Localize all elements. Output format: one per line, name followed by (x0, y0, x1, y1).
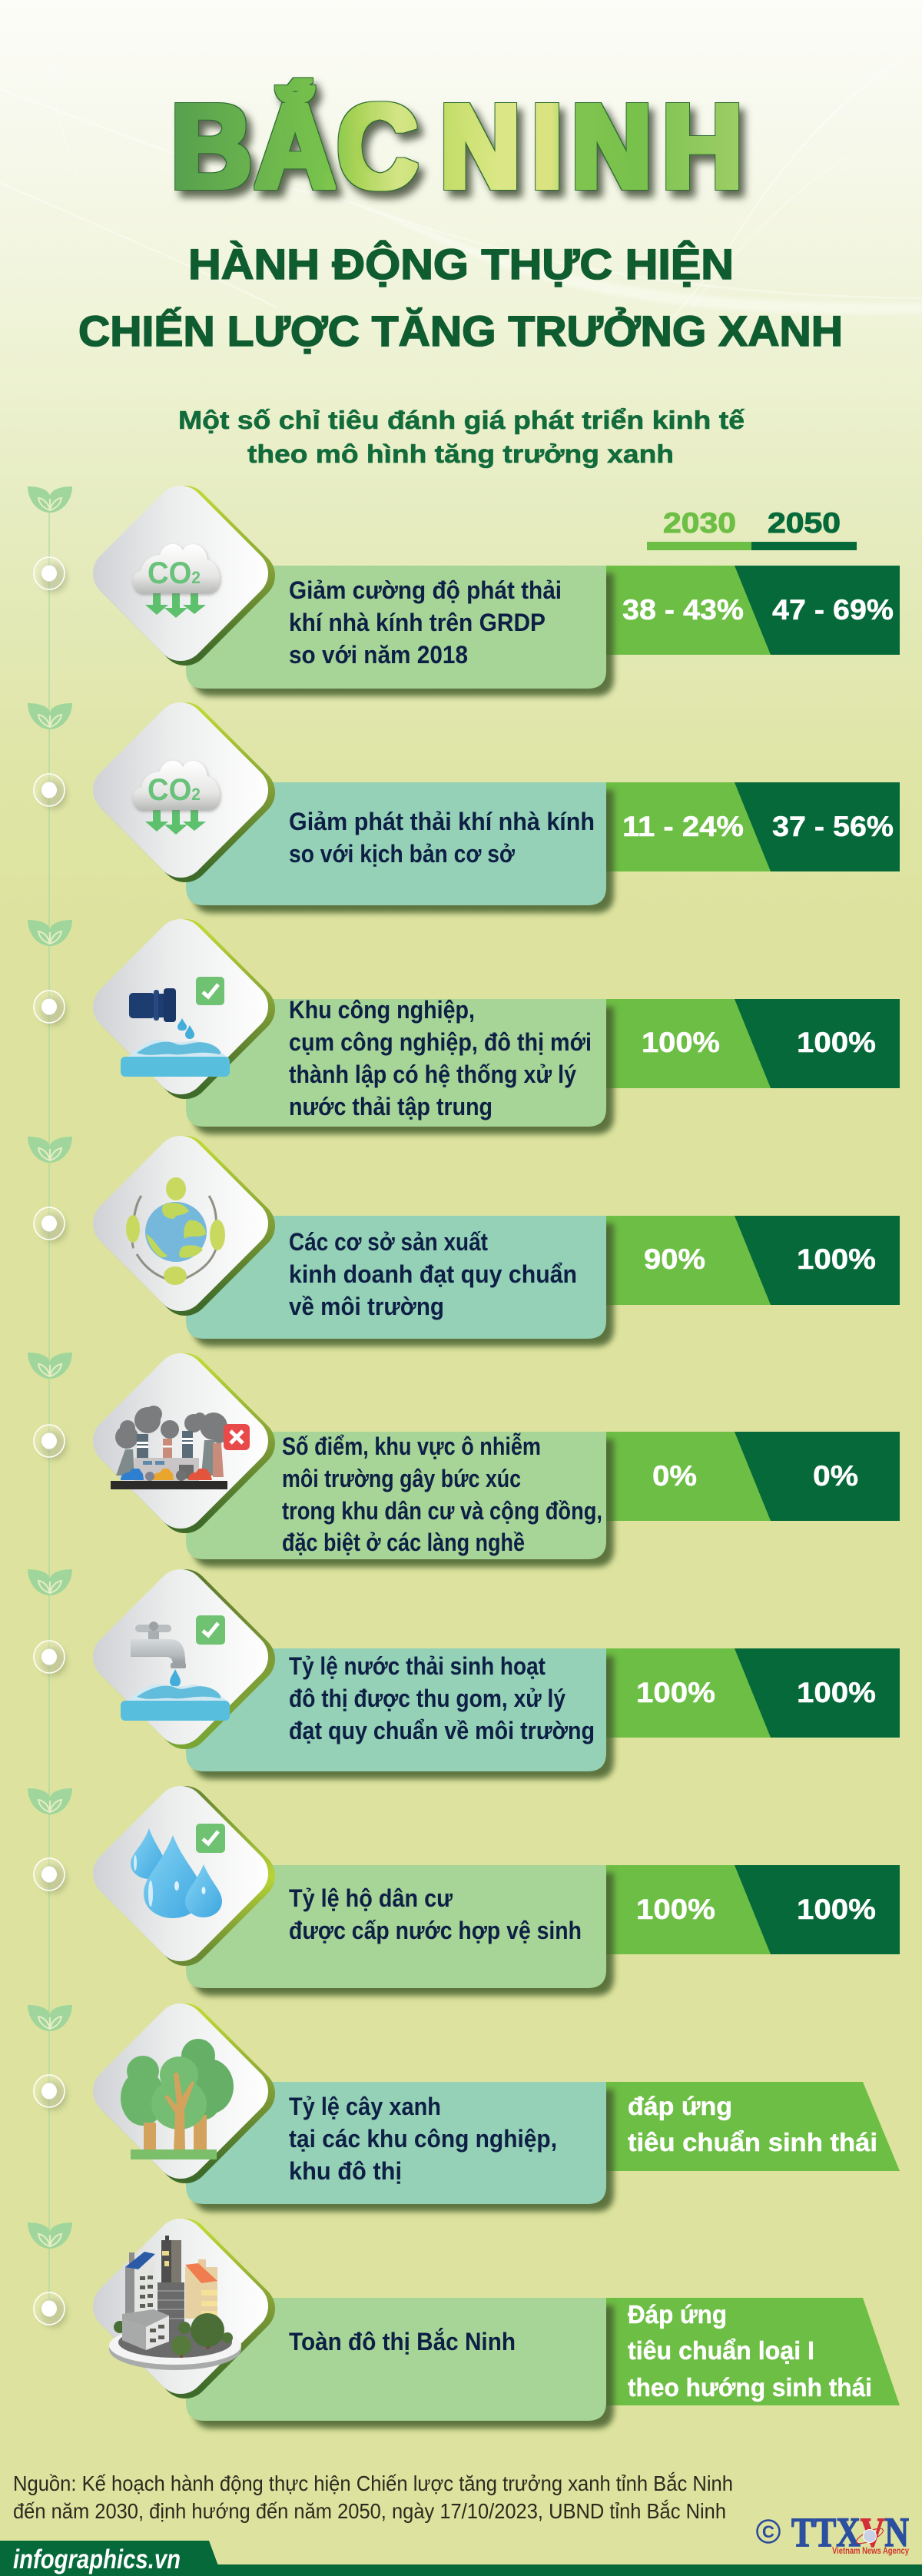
copyright logo: TTXVN: TTXVN (791, 2509, 909, 2555)
text panel 6: Tỷ lệ nước thải sinh hoạt (289, 1652, 546, 1680)
value bar 6 (606, 1648, 900, 1738)
row 9 (28, 2222, 900, 2428)
text panel 7: Tỷ lệ hộ dân cư (289, 1884, 453, 1912)
timeline marker 3 (28, 920, 72, 1026)
icon: CO2 cloud: CO2 (148, 556, 201, 590)
value bar 2: 11 - 24% (622, 811, 744, 842)
background swooshes (0, 46, 922, 323)
value bar 8: tiêu chuẩn sinh thái (628, 2128, 877, 2156)
heading: line 1: HÀNH ĐỘNG THỰC HIỆN (188, 240, 734, 288)
text panel 3: cụm công nghiệp, đô thị mới (289, 1028, 592, 1056)
row 3 (28, 920, 900, 1134)
timeline marker 9 (28, 2222, 72, 2328)
text panel 3: thành lập có hệ thống xử lý (289, 1061, 576, 1088)
value bar 4: 90% (644, 1243, 705, 1275)
icon: trees (121, 2039, 234, 2159)
value bar 9: tiêu chuẩn loại I (628, 2336, 814, 2365)
icon: CO2 cloud (133, 761, 220, 835)
icon: polluting factory (111, 1406, 250, 1489)
text panel 3: Khu công nghiệp, (289, 996, 475, 1024)
value bar 2: 37 - 56% (772, 811, 894, 842)
value bar 6: 100% (636, 1677, 715, 1708)
text panel 2 (186, 782, 614, 913)
footer band: infographics.vn (13, 2544, 181, 2574)
value bar 7: 100% (636, 1894, 715, 1925)
text panel 4: về môi trường (289, 1293, 444, 1320)
text panel 1: so với năm 2018 (289, 641, 468, 669)
icon: CO2 cloud: CO2 (148, 773, 201, 807)
icon diamond 5 (118, 1378, 250, 1509)
text panel 8: Tỷ lệ cây xanh (289, 2093, 441, 2120)
timeline marker 7 (28, 1788, 72, 1894)
text panel 5 (186, 1432, 614, 1567)
text panel 6 (186, 1648, 614, 1779)
text panel 8: khu đô thị (289, 2157, 402, 2185)
row 4 (28, 1137, 900, 1346)
text panel 5: đặc biệt ở các làng nghề (282, 1529, 525, 1556)
value bar 1 (606, 566, 900, 655)
timeline marker 6 (28, 1569, 72, 1676)
timeline marker 8 (28, 2005, 72, 2110)
row 1 (28, 486, 900, 696)
title: BẮC NINH (171, 78, 742, 214)
text panel 1 (186, 566, 614, 696)
text panel 9 (186, 2298, 614, 2428)
icon: pipe and water with check (121, 977, 230, 1077)
value bar 4 (606, 1216, 900, 1305)
subheading: theo mô hình tăng trưởng xanh (247, 440, 674, 468)
value bar 4: 100% (797, 1243, 876, 1275)
subheading: Một số chỉ tiêu đánh giá phát triển kinh tế (178, 406, 745, 434)
text panel 2: so với kịch bản cơ sở (289, 840, 515, 868)
value bar 8 (606, 2082, 900, 2171)
timeline marker 1 (28, 486, 72, 593)
row 2 (28, 703, 900, 913)
timeline marker 2 (28, 703, 72, 809)
text panel 1: khí nhà kính trên GRDP (289, 609, 546, 636)
value bar 5: 0% (813, 1460, 858, 1492)
legend: years: 2030 (663, 507, 736, 539)
subheading (178, 406, 745, 468)
icon diamond 6 (118, 1594, 250, 1725)
value bar 8: đáp ứng (628, 2092, 732, 2120)
icon diamond 1 (118, 510, 250, 641)
legend: years: 2050 (768, 507, 841, 539)
legend: years (647, 507, 857, 550)
row 5 (28, 1353, 900, 1567)
row 6 (28, 1569, 900, 1779)
text panel 2: Giảm phát thải khí nhà kính (289, 808, 595, 835)
icon diamond 2 (118, 727, 250, 858)
icon: city on platform (109, 2236, 241, 2370)
icon diamond 9 (118, 2243, 250, 2374)
icon diamond 7 (118, 1811, 250, 1941)
text panel 4 (186, 1216, 614, 1346)
value bar 1: 38 - 43% (622, 594, 744, 626)
text panel 4: kinh doanh đạt quy chuẩn (289, 1260, 577, 1288)
icon: earth with leaves (126, 1177, 225, 1285)
icon: CO2 cloud (133, 544, 220, 618)
value bar 5 (606, 1432, 900, 1521)
icon: water drops with check (131, 1824, 225, 1918)
value bar 9: Đáp ứng (628, 2300, 727, 2329)
icon diamond 3 (118, 944, 250, 1074)
text panel 3: nước thải tập trung (289, 1093, 493, 1120)
icon diamond 8 (118, 2028, 250, 2159)
value bar 7: 100% (797, 1894, 876, 1925)
text panel 6: đô thị được thu gom, xử lý (289, 1685, 565, 1712)
text panel 5: Số điểm, khu vực ô nhiễm (282, 1432, 541, 1460)
text panel 7: được cấp nước hợp vệ sinh (289, 1917, 582, 1944)
text panel 8 (186, 2082, 614, 2212)
text panel 5: môi trường gây bức xúc (282, 1465, 521, 1492)
value bar 3: 100% (642, 1027, 720, 1058)
text panel 3 (186, 996, 614, 1134)
value bar 9: theo hướng sinh thái (628, 2373, 872, 2402)
value bar 2 (606, 782, 900, 871)
text panel 7 (186, 1865, 614, 1996)
text panel 6: đạt quy chuẩn về môi trường (289, 1717, 595, 1744)
text panel 9: Toàn đô thị Bắc Ninh (289, 2328, 516, 2355)
copyright logo: TTXVN: C (762, 2522, 774, 2541)
value bar 9 (606, 2298, 900, 2405)
timeline line (48, 507, 50, 2305)
source note: Nguồn: Kế hoạch hành động thực hiện Chiến lược tăng trưởng xanh tỉnh Bắc Ninh (13, 2471, 733, 2495)
text panel 1: Giảm cường độ phát thải (289, 576, 562, 604)
text panel 8: tại các khu công nghiệp, (289, 2125, 557, 2153)
source note: đến năm 2030, định hướng đến năm 2050, ngày 17/10/2023, UBND tỉnh Bắc Ninh (13, 2499, 726, 2523)
icon diamond 4 (118, 1160, 250, 1291)
value bar 7 (606, 1865, 900, 1954)
value bar 5: 0% (652, 1460, 697, 1492)
heading: line 2: CHIẾN LƯỢC TĂNG TRƯỞNG XANH (78, 307, 843, 355)
source note (13, 2471, 733, 2523)
text panel 5: trong khu dân cư và cộng đồng, (282, 1497, 602, 1525)
timeline marker 4 (28, 1137, 72, 1243)
value bar 3: 100% (797, 1027, 876, 1058)
row 8 (28, 2005, 900, 2212)
value bar 1: 47 - 69% (772, 594, 894, 626)
timeline marker 5 (28, 1353, 72, 1460)
value bar 3 (606, 999, 900, 1088)
row 7 (28, 1788, 900, 1996)
value bar 6: 100% (797, 1677, 876, 1708)
icon: faucet and water with check (121, 1615, 230, 1721)
text panel 4: Các cơ sở sản xuất (289, 1228, 488, 1256)
footer band (0, 2541, 922, 2576)
